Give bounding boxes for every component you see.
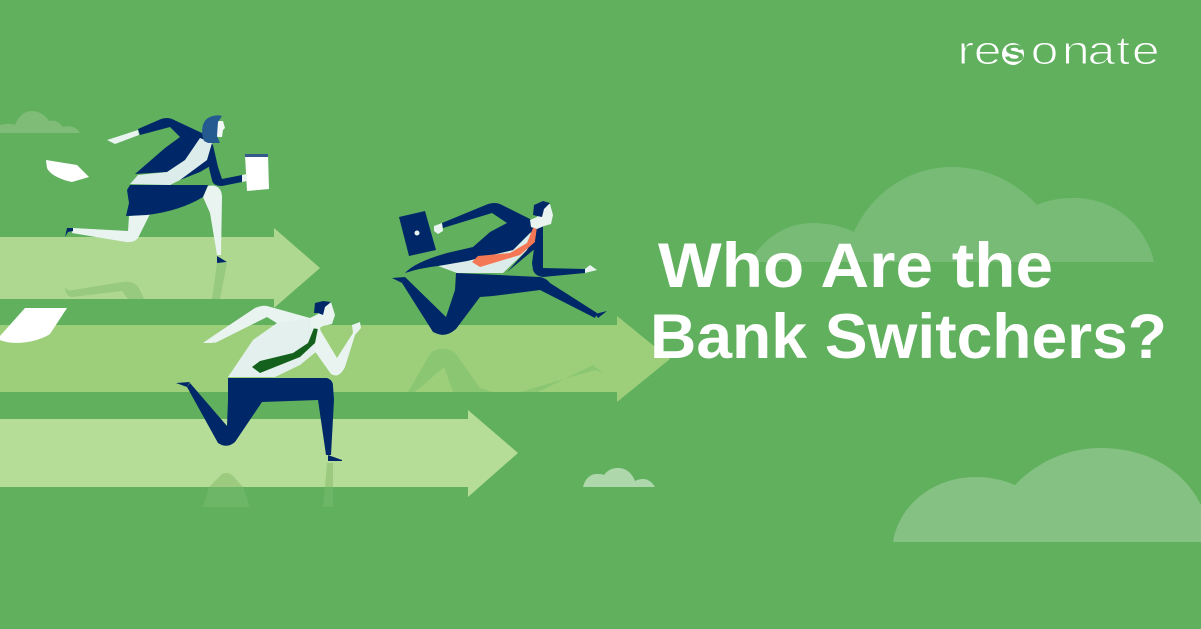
logo wordmark: s — [1005, 34, 1024, 68]
jacket — [135, 133, 213, 180]
figure: white-shirt runner with green tie — [176, 301, 361, 461]
front sleeve — [532, 223, 585, 277]
logo emblem — [1002, 43, 1024, 65]
front sleeve — [209, 145, 242, 186]
hand on notepad — [242, 174, 247, 182]
shirt — [438, 228, 538, 273]
back arm — [213, 306, 310, 343]
back arm hand — [107, 130, 139, 144]
arrow: top — [0, 228, 320, 308]
flying paper: upper — [46, 160, 89, 182]
hair — [202, 115, 222, 143]
back sleeve — [442, 203, 530, 228]
back leg — [72, 214, 150, 242]
briefcase clasp — [414, 230, 420, 236]
hair — [314, 301, 331, 315]
logo: resonate — [958, 28, 1160, 73]
cloud: large lower right — [893, 448, 1201, 542]
face — [216, 121, 225, 137]
green tie — [252, 328, 318, 373]
neck and face — [530, 204, 553, 229]
hair — [533, 201, 550, 217]
trousers — [402, 273, 597, 335]
front shoe — [595, 311, 607, 318]
front shoe — [328, 455, 342, 461]
rear shoe — [392, 277, 405, 283]
logo wordmark: re — [958, 28, 1002, 73]
rear shoe — [176, 382, 190, 387]
jacket tails — [405, 219, 538, 273]
front hand — [585, 265, 597, 273]
neck and face — [310, 302, 335, 329]
front shoe — [217, 256, 227, 263]
back sleeve — [138, 118, 202, 148]
logo wordmark: onate — [1031, 28, 1160, 73]
blouse — [130, 138, 212, 185]
notepad — [245, 154, 269, 191]
torso — [228, 318, 322, 377]
skirt — [126, 185, 208, 216]
cloud: small centre — [583, 468, 655, 487]
front leg — [203, 185, 222, 255]
figure: lead runner with briefcase and orange tie — [392, 201, 607, 335]
front arm — [314, 322, 361, 375]
arrow: bottom — [0, 410, 518, 497]
briefcase — [399, 211, 436, 256]
title line 1: Who Are the — [658, 231, 1053, 301]
reflection: lead runner — [408, 349, 603, 392]
orange tie — [472, 228, 537, 267]
hand holding briefcase — [434, 223, 443, 234]
title line 2: Bank Switchers? — [650, 302, 1167, 372]
figure: woman runner with notepad — [65, 115, 269, 263]
reflection: white-shirt runner — [203, 463, 333, 507]
trousers — [187, 378, 334, 455]
notepad binding — [245, 154, 268, 157]
reflection: woman runner — [65, 263, 227, 299]
cloud: small upper left — [0, 111, 80, 133]
back shoe — [65, 228, 73, 237]
arrow: middle — [0, 316, 670, 402]
title — [650, 231, 1167, 372]
back hand — [203, 336, 216, 343]
cloud: large upper right — [750, 167, 1154, 262]
flying paper: lower — [0, 308, 67, 343]
